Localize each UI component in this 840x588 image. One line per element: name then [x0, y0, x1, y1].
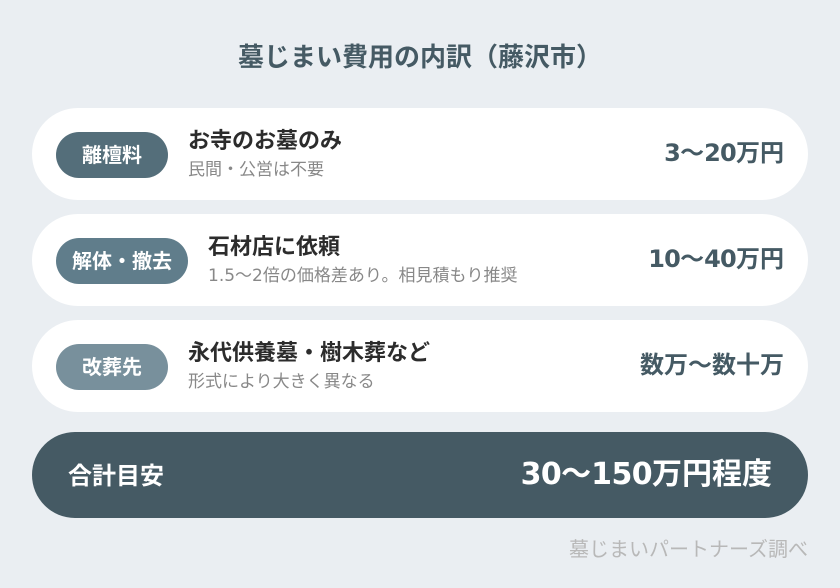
- row 3 note: 形式により大きく異なる: [188, 372, 375, 392]
- badge: 解体・撤去: [56, 238, 188, 284]
- badge: 改葬先: 改葬先: [82, 355, 142, 379]
- total label: 合計目安: [68, 462, 164, 490]
- panel: total: [32, 432, 808, 518]
- badge: 離檀料: [56, 132, 168, 178]
- badge: 改葬先: [56, 344, 168, 390]
- title: 墓じまい費用の内訳（藤沢市）: [238, 43, 602, 73]
- total amount: 30〜150万円程度: [521, 457, 772, 492]
- badge: 離檀料: 離檀料: [82, 143, 142, 167]
- row 1 note: 民間・公営は不要: [188, 160, 324, 180]
- row 2 cost: 10〜40万円: [648, 245, 784, 273]
- row 1 heading: お寺のお墓のみ: [188, 129, 342, 154]
- panel: row 3: [32, 320, 808, 412]
- row 2 heading: 石材店に依頼: [208, 235, 340, 260]
- panel: row 2: [32, 214, 808, 306]
- row 1 cost: 3〜20万円: [664, 139, 784, 167]
- panel: row 1: [32, 108, 808, 200]
- badge: 解体・撤去: 解体・撤去: [72, 249, 172, 273]
- row 3 heading: 永代供養墓・樹木葬など: [188, 341, 430, 366]
- source note: 墓じまいパートナーズ調べ: [569, 537, 808, 561]
- row 2 note: 1.5〜2倍の価格差あり。相見積もり推奨: [208, 266, 518, 286]
- row 3 cost: 数万〜数十万: [640, 351, 784, 379]
